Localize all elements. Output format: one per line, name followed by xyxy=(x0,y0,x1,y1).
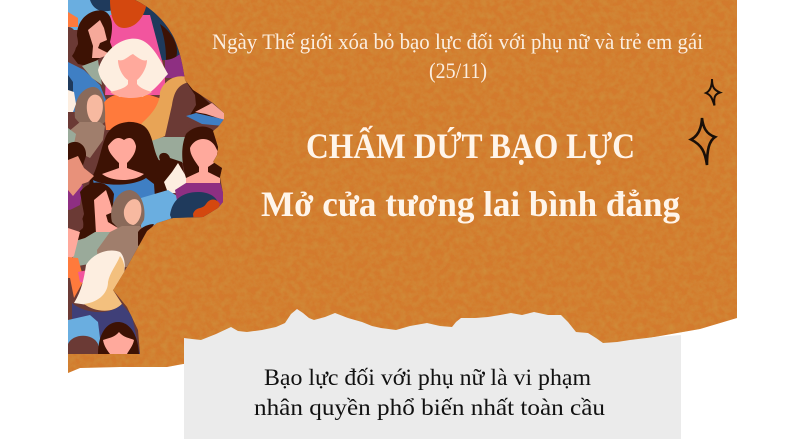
portrait silhouette filled with women xyxy=(68,0,228,360)
curly navy hair figure xyxy=(170,192,220,218)
woman in sage top, lower left xyxy=(72,182,118,266)
woman with dark hair, top left xyxy=(68,10,113,66)
silhouette base colour xyxy=(68,0,228,360)
torn paper white fringe xyxy=(600,331,700,356)
light blue figure at bottom left xyxy=(68,315,100,346)
woman with hijab xyxy=(68,87,105,158)
title xyxy=(261,126,680,224)
subtitle: (25/11) xyxy=(429,58,487,83)
woman at bottom with fringe xyxy=(98,322,139,354)
sparkle icon: small xyxy=(706,79,720,106)
orange torn paper background xyxy=(68,0,737,373)
top cluster of figures xyxy=(68,0,190,95)
sparkle icon: large xyxy=(691,118,715,165)
subtitle: Ngày Thế giới xóa bỏ bạo lực đối với phụ nữ và trẻ em gái xyxy=(212,29,703,54)
title: Mở cửa tương lai bình đẳng xyxy=(261,184,680,224)
title: CHẤM DỨT BẠO LỰC xyxy=(306,126,635,166)
statement text: nhân quyền phổ biến nhất toàn cầu xyxy=(254,395,605,421)
torn grey paper panel xyxy=(184,309,681,439)
blonde woman, centre xyxy=(98,39,168,130)
blue and sage garments at left xyxy=(68,60,106,112)
profile woman with purple top at left xyxy=(68,142,94,210)
second hijab woman xyxy=(97,190,154,268)
blonde woman from behind xyxy=(68,250,125,311)
bun woman with light blue top xyxy=(141,153,187,233)
curly brown head at bottom left xyxy=(68,336,100,354)
statement text xyxy=(254,365,605,421)
woman with dark hair at right of the face xyxy=(175,127,226,212)
subtitle xyxy=(212,29,703,83)
navy jacket figure xyxy=(72,303,140,354)
brown curly head at left xyxy=(68,210,83,260)
large woman with long dark hair xyxy=(89,122,167,204)
woman with amber hair and dark profile xyxy=(139,76,226,163)
statement text: Bạo lực đối với phụ nữ là vi phạm xyxy=(264,365,591,391)
